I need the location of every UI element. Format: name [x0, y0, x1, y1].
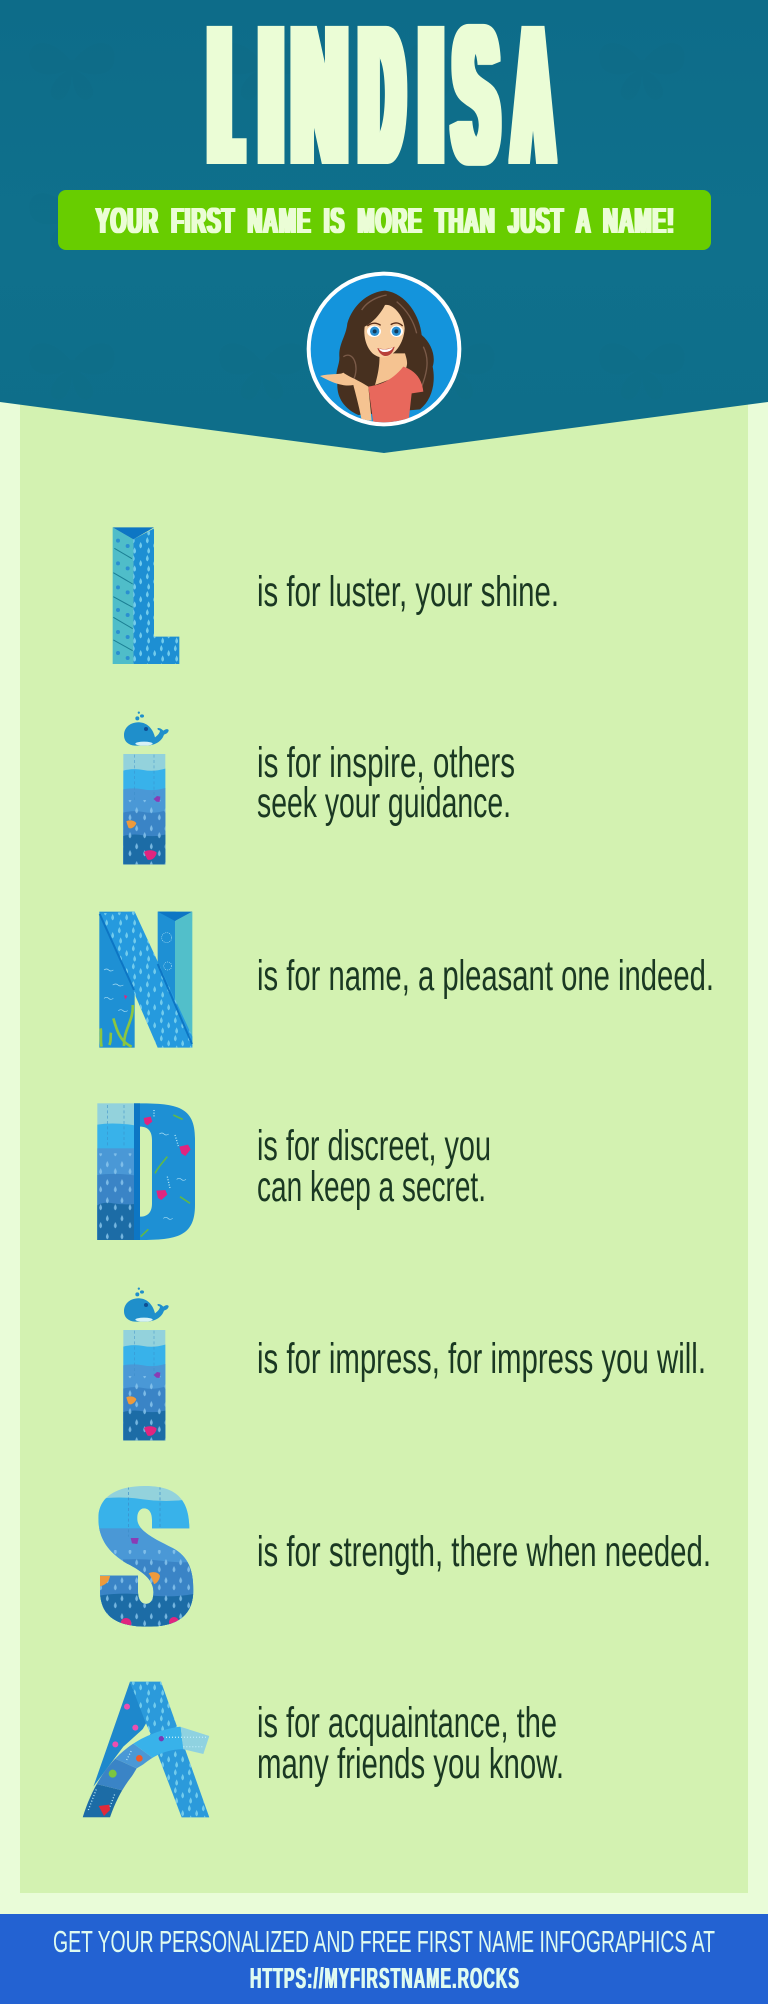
header banner [0, 0, 768, 453]
tagline bar [58, 190, 711, 250]
letter L [113, 527, 179, 664]
text: I (inspire): seek your guidance. [257, 779, 511, 827]
text: L: is for luster, your shine. [257, 568, 559, 616]
letter D [97, 1103, 195, 1240]
content panel [20, 404, 748, 1893]
text: A [257, 1699, 564, 1788]
letter I with whale (second) [123, 1287, 169, 1440]
footer bar [0, 1914, 768, 2004]
avatar: woman in circle [309, 274, 459, 424]
letter N [99, 912, 192, 1048]
footer url: HTTPS://MYFIRSTNAME.ROCKS [250, 1963, 520, 1995]
text: I (inspire) [257, 739, 515, 827]
letter A [82, 1682, 210, 1818]
text: I (inspire): is for inspire, others [257, 739, 515, 787]
text: A: is for acquaintance, the [257, 1699, 557, 1747]
letter S [98, 1486, 194, 1627]
letter I with whale [123, 711, 169, 864]
text: D [257, 1122, 491, 1211]
text: D: can keep a secret. [257, 1163, 486, 1211]
text: A: many friends you know. [257, 1740, 564, 1788]
text: D: is for discreet, you [257, 1122, 491, 1170]
title [214, 0, 552, 205]
